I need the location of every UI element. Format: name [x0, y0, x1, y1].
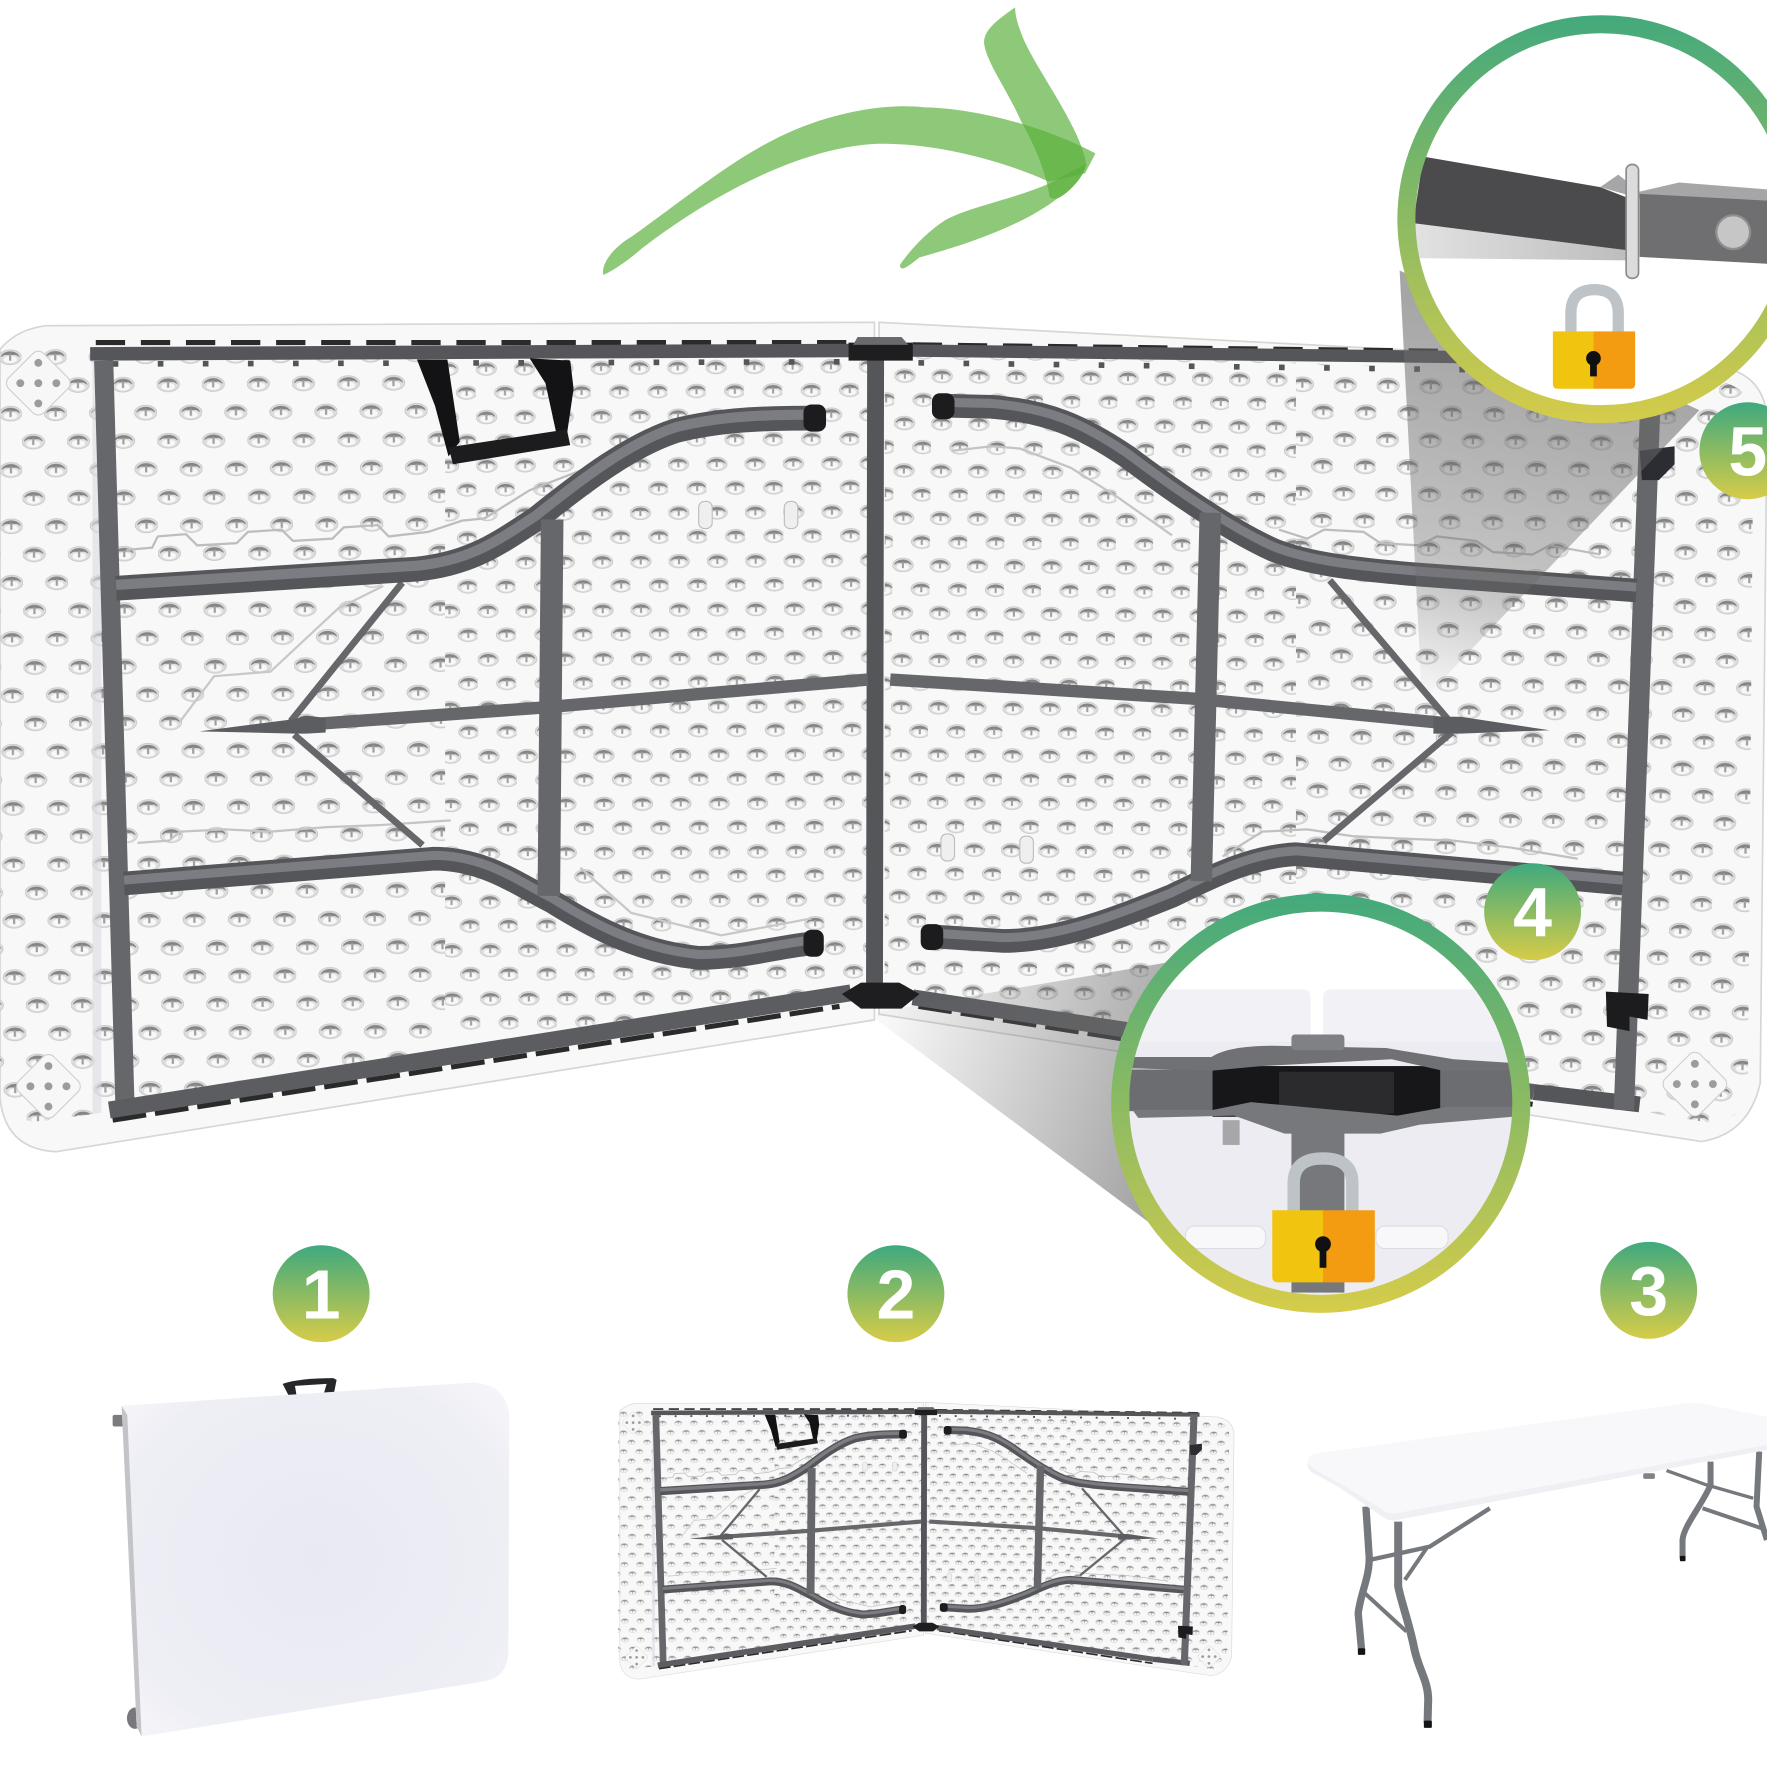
- badge: 4: 4: [1513, 873, 1552, 951]
- badge: 2: 2: [876, 1255, 915, 1333]
- badge: 5: [1699, 402, 1767, 499]
- icon: padlock 5: [1553, 290, 1635, 389]
- callout shadow: cone to detail 4: [877, 958, 1195, 1240]
- step 3: standing table: [1307, 1403, 1767, 1728]
- badge: 3: 3: [1629, 1252, 1668, 1330]
- step 1: folded table: [113, 1378, 509, 1737]
- panel: unfolded table underside: [0, 322, 1767, 1152]
- badge: 5: 5: [1728, 413, 1767, 491]
- badge: 1: [273, 1245, 370, 1342]
- badge: 3: [1600, 1242, 1697, 1339]
- callout shadow: cone to detail 5: [1400, 270, 1699, 701]
- callout: detail 5 leg lock: [1405, 23, 1767, 415]
- step 2: half-open table: [618, 1402, 1235, 1679]
- callout: detail 4 hinge: [1116, 903, 1533, 1312]
- icon: padlock 4: [1272, 1158, 1375, 1282]
- badge: 2: [847, 1245, 944, 1342]
- badge: 1: 1: [302, 1255, 341, 1333]
- arrow: green ribbon: [603, 7, 1095, 275]
- badge: 4: [1484, 863, 1581, 960]
